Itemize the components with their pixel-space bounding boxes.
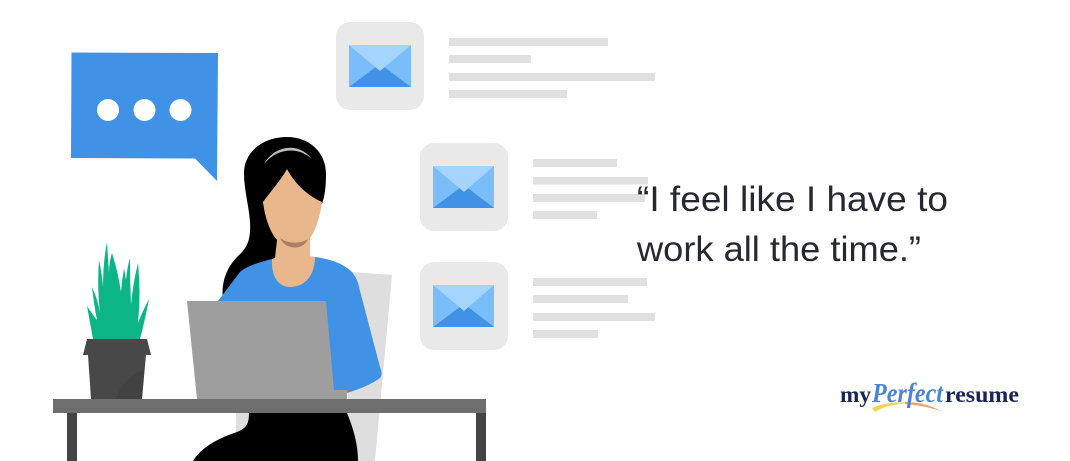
icon: speech bubble: [71, 52, 218, 181]
email row 2: [420, 143, 648, 231]
illustration: laptop: [187, 301, 347, 399]
quote text: [636, 180, 948, 269]
illustration: desk: [53, 399, 486, 461]
illustration: blue top: [218, 257, 382, 400]
illustration: chair: [236, 272, 392, 461]
logo: [840, 378, 1019, 412]
illustration: hair: [223, 137, 326, 300]
quote text: work all the time.”: [636, 230, 921, 269]
logo: resume: [945, 382, 1019, 407]
illustration: hairband: [264, 148, 312, 164]
illustration: skirt: [193, 413, 358, 461]
logo: my: [840, 382, 871, 407]
illustration: face and neck: [263, 169, 322, 287]
illustration: plant pot: [83, 339, 151, 399]
email row 3: [420, 262, 655, 350]
logo: Perfect: [871, 378, 944, 408]
email row 1: [336, 22, 655, 110]
quote text: “I feel like I have to: [637, 180, 948, 219]
illustration: plant: [87, 242, 149, 339]
